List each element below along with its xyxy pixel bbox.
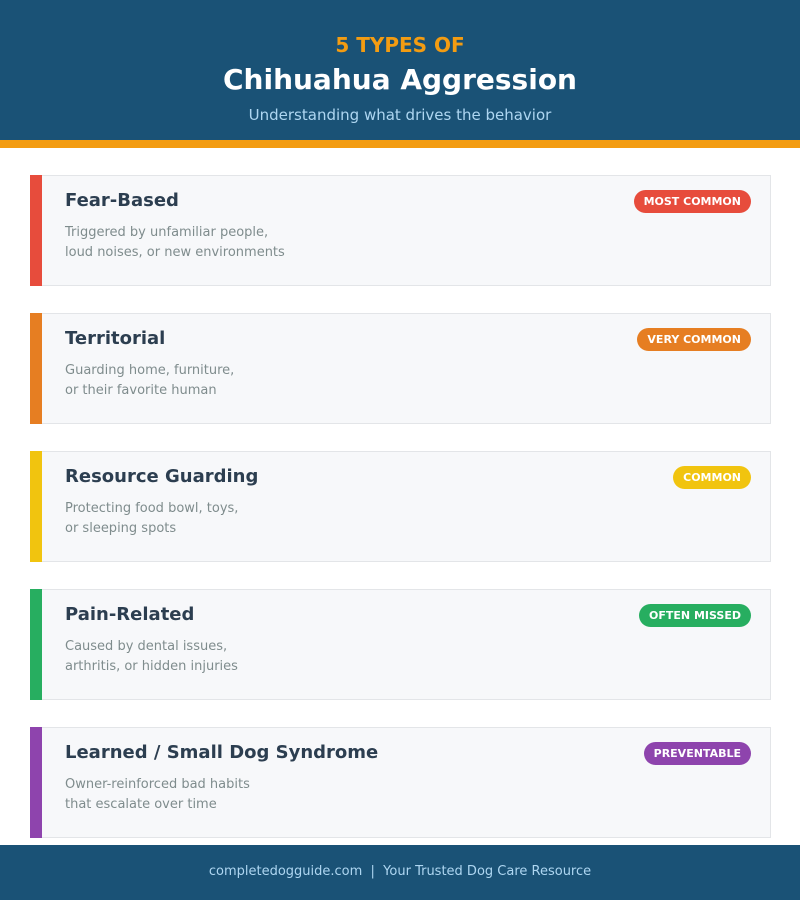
- description: [65, 501, 238, 536]
- footer: [0, 845, 800, 900]
- description: that escalate over time: [65, 797, 217, 812]
- heading: Learned / Small Dog Syndrome: [65, 742, 378, 763]
- card: territorial: [30, 313, 771, 424]
- footer: completedogguide.com | Your Trusted Dog Care Resource: [209, 864, 591, 879]
- eyebrow: 5 TYPES OF: [335, 33, 465, 57]
- description: Protecting food bowl, toys,: [65, 501, 238, 516]
- description: or their favorite human: [65, 383, 217, 398]
- card: resource guarding: [30, 451, 771, 562]
- badge: [639, 604, 751, 627]
- heading: Pain-Related: [65, 604, 194, 625]
- description: or sleeping spots: [65, 521, 176, 536]
- badge: [634, 190, 751, 213]
- heading: Territorial: [65, 328, 165, 349]
- description: Caused by dental issues,: [65, 639, 227, 654]
- description: loud noises, or new environments: [65, 245, 285, 260]
- description: [64, 225, 285, 260]
- card: learned: [30, 727, 771, 838]
- subtitle: Understanding what drives the behavior: [249, 106, 551, 124]
- header: [0, 0, 800, 140]
- description: Guarding home, furniture,: [65, 363, 234, 378]
- title: Chihuahua Aggression: [223, 63, 577, 96]
- badge: [644, 742, 751, 765]
- badge: [673, 466, 751, 489]
- badge: COMMON: [683, 471, 741, 484]
- badge: [637, 328, 751, 351]
- badge: OFTEN MISSED: [649, 609, 741, 622]
- description: Triggered by unfamiliar people,: [65, 225, 268, 240]
- description: arthritis, or hidden injuries: [65, 659, 238, 674]
- badge: MOST COMMON: [644, 195, 741, 208]
- card: pain-related: [30, 589, 771, 700]
- heading: Resource Guarding: [65, 466, 258, 487]
- card: fear-based: [30, 175, 771, 286]
- badge: VERY COMMON: [647, 333, 741, 346]
- description: [65, 777, 250, 812]
- description: [65, 639, 238, 674]
- description: Owner-reinforced bad habits: [65, 777, 250, 792]
- heading: Fear-Based: [65, 190, 179, 211]
- badge: PREVENTABLE: [654, 747, 741, 760]
- description: [65, 363, 234, 398]
